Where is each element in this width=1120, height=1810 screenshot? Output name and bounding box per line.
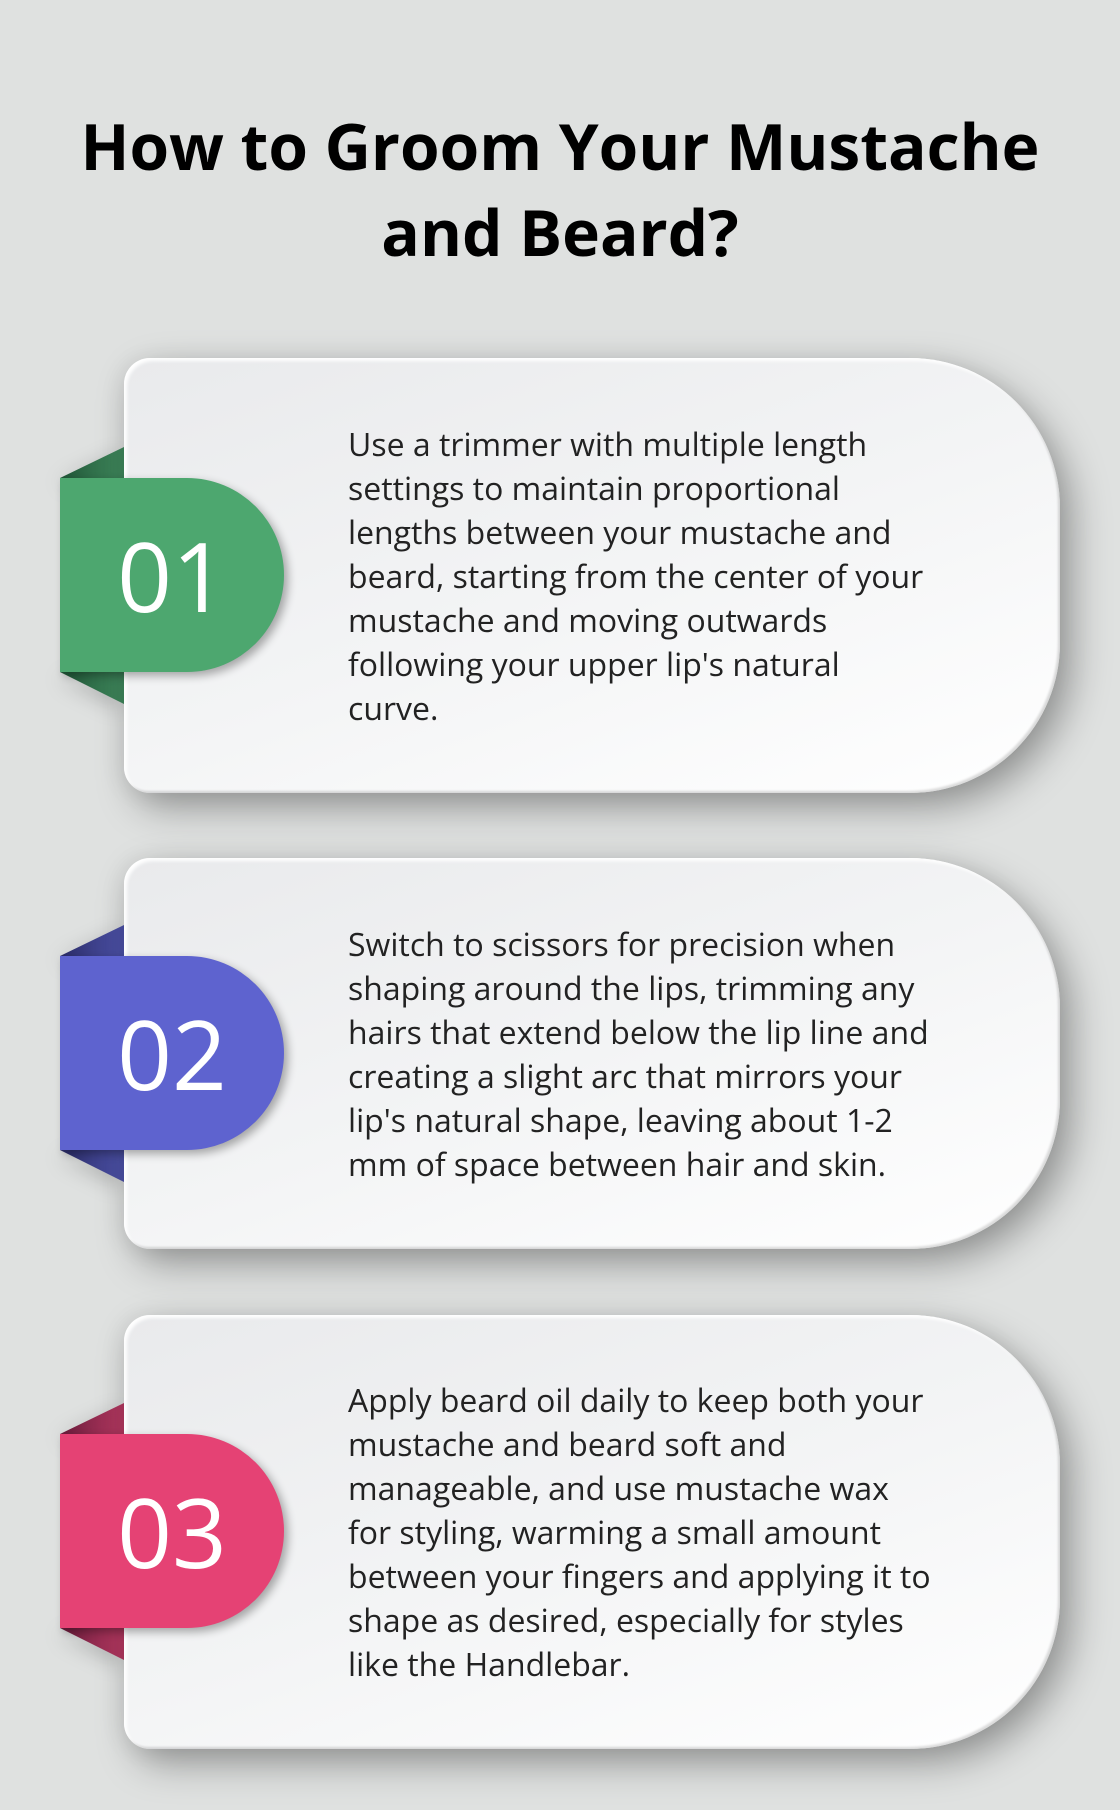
text: step 1 bbox=[348, 423, 923, 730]
text: step 2: lip's natural shape, leaving about 1-2 bbox=[348, 1099, 893, 1142]
panel: step 3 bbox=[58, 1304, 1094, 1785]
text: step 1: following your upper lip's natural bbox=[348, 643, 840, 686]
panel: step 2 bbox=[58, 847, 1094, 1285]
title bbox=[81, 102, 1039, 275]
text: step 1: lengths between your mustache and bbox=[348, 511, 891, 554]
title: and Beard? bbox=[381, 188, 739, 275]
text: step 1: mustache and moving outwards bbox=[348, 599, 827, 642]
text: step 1: settings to maintain proportional bbox=[348, 467, 840, 510]
card: step 1 bbox=[124, 358, 1060, 793]
text: step 3: shape as desired, especially for styles bbox=[348, 1599, 904, 1642]
text: step 3: mustache and beard soft and bbox=[348, 1423, 786, 1466]
badge: 03: 03 bbox=[117, 1466, 227, 1597]
badge: 02: 02 bbox=[117, 988, 227, 1119]
flap shadow and folded ribbon, step 2 bbox=[60, 925, 124, 1190]
text: step 2: creating a slight arc that mirrors your bbox=[348, 1055, 902, 1098]
text: step 2: hairs that extend below the lip line and bbox=[348, 1011, 929, 1054]
card: step 3 bbox=[124, 1315, 1060, 1749]
badge: 03 bbox=[60, 1434, 284, 1628]
text: step 1: Use a trimmer with multiple length bbox=[348, 423, 867, 466]
text: step 2 bbox=[348, 923, 929, 1186]
text: step 3 bbox=[348, 1379, 931, 1686]
panel: step 1 bbox=[58, 347, 1094, 829]
badge: 01: 01 bbox=[117, 510, 227, 641]
text: step 3: between your fingers and applying it to bbox=[348, 1555, 931, 1598]
text: step 2: Switch to scissors for precision when bbox=[348, 923, 895, 966]
flap shadow and folded ribbon, step 1 bbox=[60, 447, 124, 712]
text: step 3: for styling, warming a small amount bbox=[348, 1511, 881, 1554]
text: step 1: beard, starting from the center of your bbox=[348, 555, 923, 598]
text: step 3: Apply beard oil daily to keep both your bbox=[348, 1379, 923, 1422]
text: step 2: mm of space between hair and skin. bbox=[348, 1143, 886, 1186]
text: step 2: shaping around the lips, trimming any bbox=[348, 967, 915, 1010]
flap shadow and folded ribbon, step 3 bbox=[60, 1403, 124, 1668]
title: How to Groom Your Mustache bbox=[81, 102, 1039, 189]
text: step 3: manageable, and use mustache wax bbox=[348, 1467, 889, 1510]
badge: 01 bbox=[60, 478, 284, 672]
text: step 1: curve. bbox=[348, 687, 438, 730]
badge: 02 bbox=[60, 956, 284, 1150]
card: step 2 bbox=[124, 858, 1060, 1249]
text: step 3: like the Handlebar. bbox=[348, 1643, 630, 1686]
